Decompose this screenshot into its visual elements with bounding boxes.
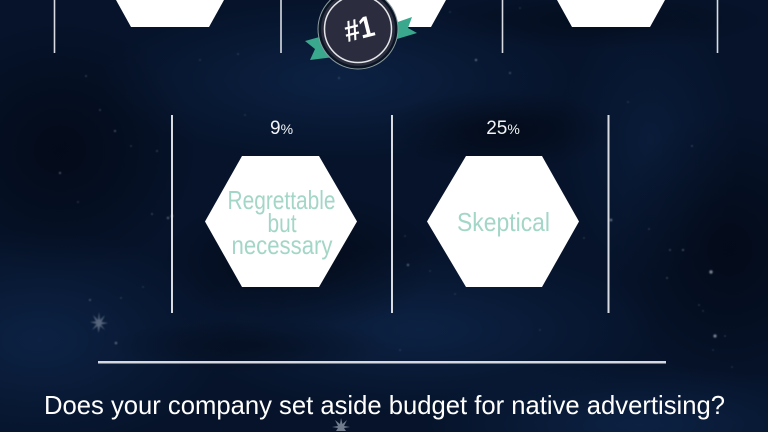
top hexagons, cropped by the frame	[116, 0, 665, 27]
hexagon label: Skeptical	[457, 207, 550, 237]
hexagon label: but	[268, 208, 297, 238]
hexagon label: Regrettable	[228, 185, 336, 215]
hexagon	[427, 156, 579, 287]
percentage value: 25%	[486, 118, 520, 139]
seal outer ring	[318, 0, 398, 69]
seal disc	[321, 0, 395, 66]
star flare: lower left	[90, 312, 108, 333]
badge: number one ribbon seal	[305, 0, 417, 69]
hexagon	[205, 156, 357, 287]
bottom column dividers	[172, 115, 608, 313]
seal inner ring	[324, 0, 392, 62]
hexagon label	[228, 185, 336, 260]
background stars	[59, 7, 733, 368]
top column dividers	[54, 0, 718, 53]
star flare: bottom centre	[332, 418, 350, 431]
stat: 25 percent	[427, 118, 579, 287]
stat: 9 percent	[205, 118, 357, 287]
section divider	[98, 361, 666, 364]
ribbon right tail	[392, 17, 417, 39]
hexagon label: necessary	[232, 230, 332, 260]
section question heading: Does your company set aside budget for native advertising?	[44, 390, 725, 420]
ribbon left tail	[305, 36, 334, 60]
percentage value: 9%	[270, 118, 293, 139]
badge label: #1	[341, 10, 378, 49]
